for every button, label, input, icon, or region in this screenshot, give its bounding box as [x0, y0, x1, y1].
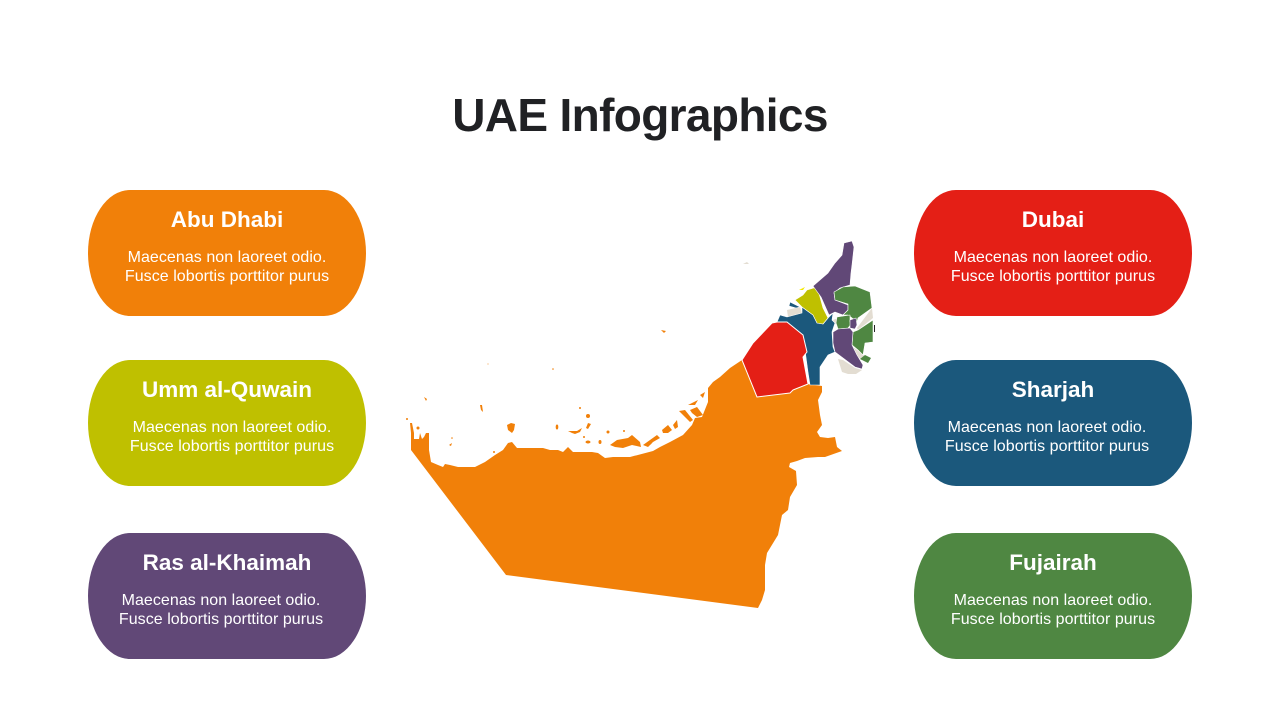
map region: Ajman sliver	[799, 287, 805, 290]
text: Abu Dhabi description	[125, 249, 329, 285]
heading: Ras al-Khaimah: Ras al-Khaimah	[143, 550, 311, 575]
map region: Fujairah east	[852, 320, 873, 355]
panel: Abu Dhabi	[88, 190, 366, 316]
text: Ras al-Khaimah description: Fusce lobortis porttitor purus	[119, 611, 323, 628]
text: Dubai description: Maecenas non laoreet odio.	[954, 249, 1152, 266]
map region: Abu Dhabi	[406, 330, 842, 608]
map region: Dubai	[742, 322, 808, 397]
text: Sharjah description	[945, 419, 1149, 455]
panel: Dubai	[914, 190, 1192, 316]
text: Ras al-Khaimah description	[119, 592, 323, 628]
map region: Umm al-Quwain	[795, 287, 828, 324]
text: Abu Dhabi description: Maecenas non laoreet odio.	[128, 249, 326, 266]
text: Sharjah description: Fusce lobortis porttitor purus	[945, 438, 1149, 455]
panel: Fujairah	[914, 533, 1192, 659]
panel: Ras al-Khaimah	[88, 533, 366, 659]
text: Umm al-Quwain description: Maecenas non laoreet odio.	[133, 419, 331, 436]
map region: Enclave purple	[850, 318, 857, 329]
text: Ras al-Khaimah description: Maecenas non laoreet odio.	[122, 592, 320, 609]
heading: Umm al-Quwain: Umm al-Quwain	[142, 377, 312, 402]
text: Fujairah description: Maecenas non laoreet odio.	[954, 592, 1152, 609]
panel: Sharjah	[914, 360, 1192, 486]
heading: Dubai: Dubai	[1022, 207, 1084, 232]
map region: Ras al-Khaimah	[813, 241, 854, 315]
map region: Fujairah north	[834, 286, 872, 322]
heading: Fujairah: Fujairah	[1009, 550, 1097, 575]
text: Umm al-Quwain description	[130, 419, 334, 455]
map region: Neutral territories	[743, 262, 873, 374]
heading: Sharjah: Sharjah	[1012, 377, 1094, 402]
text: Umm al-Quwain description: Fusce lobortis porttitor purus	[130, 438, 334, 455]
text: Fujairah description: Fusce lobortis porttitor purus	[951, 611, 1155, 628]
panel: Umm al-Quwain	[88, 360, 366, 486]
text: Abu Dhabi description: Fusce lobortis porttitor purus	[125, 268, 329, 285]
text: Fujairah description	[951, 592, 1155, 628]
heading: Abu Dhabi: Abu Dhabi	[171, 207, 283, 232]
map region: Ras al-Khaimah south	[833, 328, 863, 369]
map region: Fujairah south	[860, 355, 871, 363]
text: Sharjah description: Maecenas non laoreet odio.	[948, 419, 1146, 436]
map region: Enclave green	[836, 315, 855, 329]
map region: Sharjah	[777, 302, 835, 385]
title: UAE Infographics	[452, 89, 828, 141]
text: Dubai description	[951, 249, 1155, 285]
map region: Black marker	[874, 325, 875, 332]
text: Dubai description: Fusce lobortis porttitor purus	[951, 268, 1155, 285]
